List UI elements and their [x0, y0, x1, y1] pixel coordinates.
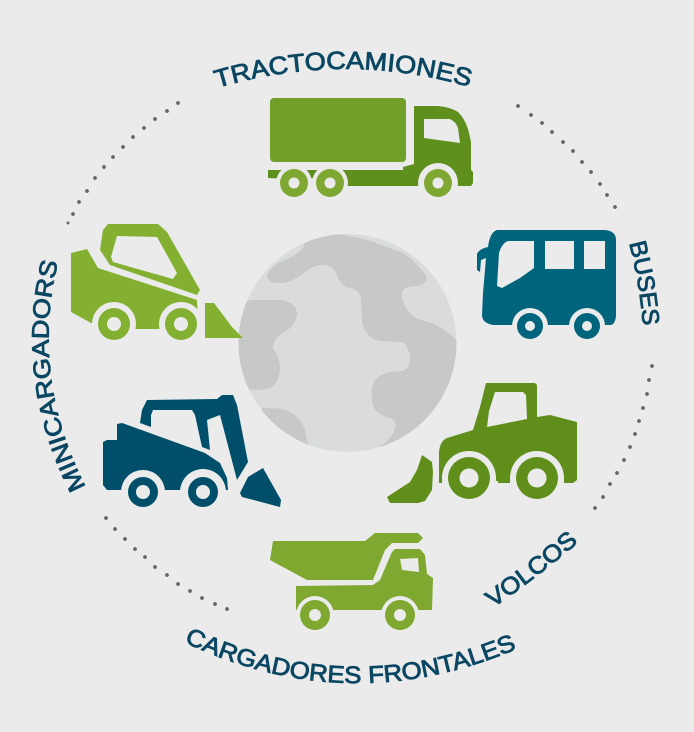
label: cargadores frontales: CARGADORES FRONTALES [187, 630, 515, 684]
icon: mini loader (dark blue) [103, 395, 281, 515]
truck lower-left cut [262, 178, 320, 192]
dump truck wheel hubs [309, 609, 406, 621]
globe land: bottom left [262, 408, 308, 445]
truck cargo box [270, 98, 406, 162]
loader bucket [387, 455, 433, 503]
mini loader wheel hubs [136, 485, 210, 499]
skid steer wheel arches [85, 302, 203, 346]
dump bed [270, 533, 423, 580]
label: minicargadors: MINICARGADORS [32, 260, 86, 493]
loader wheel hubs [460, 468, 546, 488]
label: volcos: VOLCOS [482, 532, 576, 604]
icon: skid steer (top left) [71, 224, 243, 346]
dotted arc: top left [66, 101, 180, 225]
skid steer body [71, 249, 198, 329]
dump truck window [400, 558, 419, 572]
dotted arc: top right [516, 104, 617, 209]
mini loader wheels [128, 477, 218, 507]
loader wheels [448, 457, 558, 499]
truck cab and chassis [268, 106, 473, 186]
infographic: vehicles around the globe [32, 51, 660, 684]
skid steer wheel hubs [107, 317, 188, 331]
bus windows [497, 241, 605, 288]
label: tractocamiones: TRACTOCAMIONES [212, 51, 472, 86]
bus wheel hubs [525, 321, 592, 331]
truck wheel arches [276, 163, 458, 203]
truck wheels [280, 169, 452, 197]
mini loader arm and roof [140, 395, 248, 480]
loader window [487, 392, 527, 427]
dotted arc: bottom left [104, 516, 229, 611]
icon: dump truck (volco) [270, 533, 433, 634]
skid steer cab [100, 224, 200, 295]
dotted arc: right [593, 364, 654, 510]
label: buses: BUSES [629, 240, 660, 325]
bus wheels [517, 313, 600, 339]
truck window [424, 119, 460, 143]
mini loader bucket [240, 468, 281, 507]
loader body and cab [439, 383, 577, 483]
bus wheel arches [512, 308, 605, 344]
dump truck wheel arches [296, 596, 419, 634]
dump truck cab and chassis [296, 549, 433, 610]
globe [232, 234, 460, 452]
icon: truck (tractocamiones) [262, 98, 473, 203]
dump truck wheels [300, 600, 415, 630]
skid steer bucket [205, 303, 243, 338]
globe land: top and right [267, 234, 460, 448]
bus body [477, 230, 616, 325]
truck wheel hubs [288, 178, 444, 188]
globe land: left [232, 300, 297, 390]
mini loader body [103, 423, 228, 490]
skid steer wheels [98, 308, 197, 340]
mini loader wheel arches [121, 469, 226, 515]
loader wheel arches [442, 451, 564, 505]
icon: front loader (right) [387, 383, 577, 505]
icon: bus [477, 230, 616, 344]
